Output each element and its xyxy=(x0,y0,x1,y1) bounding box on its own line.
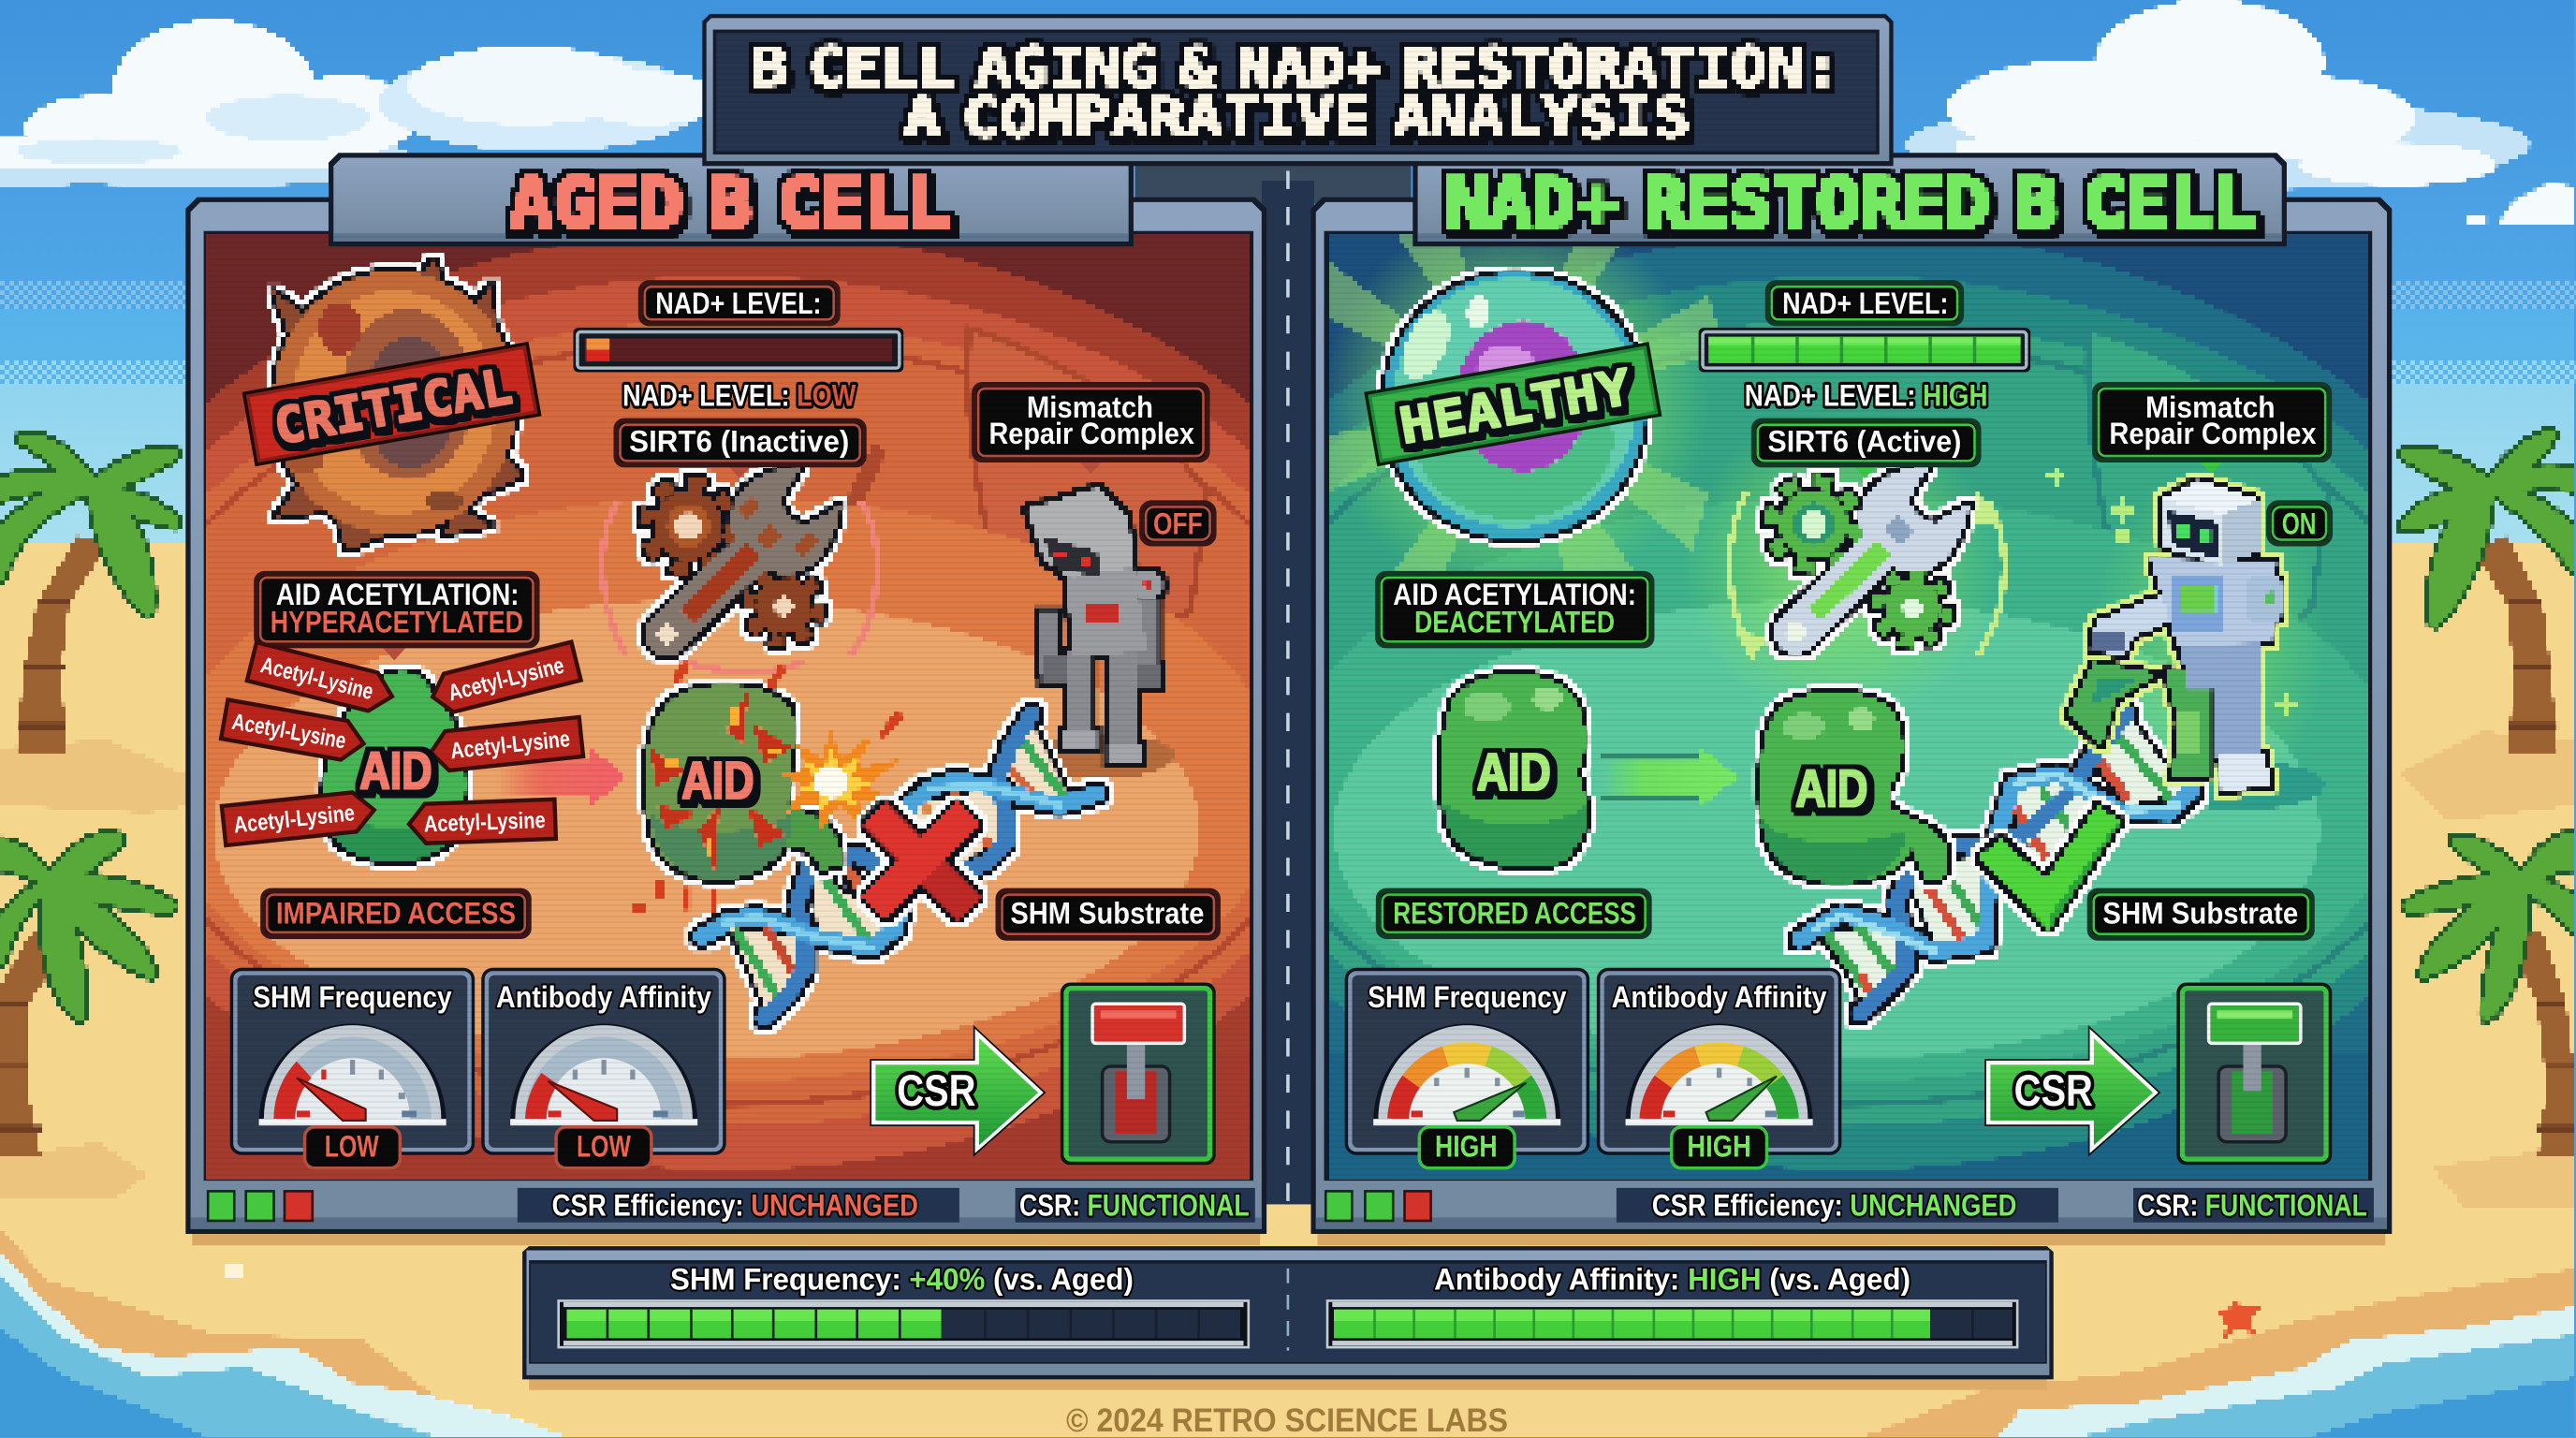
panel: aged B cell xyxy=(37,153,1418,1245)
wet sand band left xyxy=(0,1229,575,1438)
label: SHM substrate restored: SHM Substrate xyxy=(2102,896,2298,930)
label: impaired access: IMPAIRED ACCESS xyxy=(276,896,516,930)
gauge: SHM frequency low xyxy=(231,969,473,1168)
arrow: CSR aged: CSR xyxy=(897,1066,975,1116)
header tab: aged xyxy=(329,153,1134,246)
gauge: antibody affinity low xyxy=(483,969,724,1168)
panel: NAD+ restored B cell xyxy=(1158,153,2538,1245)
bar: NAD+ level low xyxy=(573,328,903,373)
cloud right xyxy=(1906,0,2576,225)
sirt6 inactive glow rings xyxy=(602,501,877,672)
text: NAD+ level high: NAD+ LEVEL: HIGH xyxy=(1745,378,1988,412)
status bar: aged: CSR Efficiency: UNCHANGED xyxy=(552,1189,918,1223)
arrow: aged AID to DNA xyxy=(498,746,626,808)
icon: green check mark xyxy=(1978,805,2121,930)
gauge: SHM frequency low: LOW xyxy=(325,1130,379,1164)
gauge: antibody affinity high: HIGH xyxy=(1687,1130,1751,1164)
aged panel frame xyxy=(185,198,1266,1245)
heading: aged B cell: AGED B CELL xyxy=(509,164,951,242)
status bar: restored: CSR: FUNCTIONAL xyxy=(2137,1189,2367,1223)
icon: critical damaged cell xyxy=(272,259,522,550)
switch: CSR lever aged xyxy=(1063,986,1212,1162)
sand shadow patches xyxy=(0,731,2576,1208)
label: restored access: RESTORED ACCESS xyxy=(1393,896,1636,930)
icon: DNA helix aged xyxy=(701,714,1097,1017)
tag 4: Acetyl-Lysine xyxy=(449,726,571,764)
tag 6 xyxy=(408,800,556,844)
icon: damaged AID enzyme xyxy=(645,685,842,880)
pixel display lettering xyxy=(509,35,2256,242)
label: mismatch repair complex restored xyxy=(2095,385,2330,473)
status bar: aged xyxy=(208,1188,1255,1223)
shallow water left xyxy=(0,1273,444,1438)
label: SIRT6 active: SIRT6 (Active) xyxy=(1767,425,1961,459)
tag 1: Acetyl-Lysine xyxy=(258,653,375,705)
aged cell interior background xyxy=(206,234,1250,1180)
icon: healthy cell xyxy=(1383,272,1647,539)
deep water left xyxy=(0,1328,213,1438)
label: mismatch repair complex aged xyxy=(974,385,1208,473)
label: ON xyxy=(2269,503,2330,544)
heading: NAD+ restored B cell: NAD+ RESTORED B CELL xyxy=(1445,164,2256,242)
cloud left xyxy=(0,20,419,187)
label: SIRT6 inactive: SIRT6 (Inactive) xyxy=(629,425,849,459)
icon: deactivated robot xyxy=(1027,488,1164,764)
badge: HEALTHY plate xyxy=(1364,342,1661,466)
icon: spark burst xyxy=(634,660,903,914)
arrow: CSR restored: CSR xyxy=(2014,1066,2093,1116)
label: AID acetylation hyperacetylated: HYPERACETYLATED xyxy=(271,606,523,639)
text: AID on damaged enzyme: AID xyxy=(681,751,754,810)
label: SHM substrate aged xyxy=(998,890,1218,938)
label: AID acetylation deacetylated: AID ACETYLATION: xyxy=(1393,578,1636,611)
restored cell interior background xyxy=(1158,211,2538,1232)
icon: shiny wrench and gears xyxy=(1745,447,1985,684)
ocean dither band upper xyxy=(0,281,2576,309)
palm tree upper left xyxy=(0,438,174,753)
arrow: CSR restored xyxy=(1985,1027,2159,1155)
central divider strip xyxy=(1135,161,1412,1204)
ocean dither band lower xyxy=(0,360,2576,384)
gauge: SHM frequency low: SHM Frequency xyxy=(253,980,452,1014)
gauge: antibody affinity high xyxy=(1599,969,1840,1168)
tag 2: Acetyl-Lysine xyxy=(446,653,566,706)
label: SIRT6 active xyxy=(1753,420,1979,478)
label: mismatch repair complex aged: Repair Complex xyxy=(989,417,1194,450)
label: OFF: OFF xyxy=(1153,506,1203,540)
gauge: antibody affinity low: LOW xyxy=(577,1130,631,1164)
shell xyxy=(227,1265,242,1277)
palm tree upper right xyxy=(2405,435,2576,753)
title text xyxy=(751,35,1840,150)
sea foam left xyxy=(0,1251,575,1438)
text: AID on hyperacetylated enzyme: AID xyxy=(359,741,432,800)
gauge: SHM frequency high xyxy=(1346,969,1588,1168)
gauge: SHM frequency high: SHM Frequency xyxy=(1368,980,1567,1014)
switch: CSR lever restored xyxy=(2180,986,2329,1162)
header tab: restored xyxy=(1412,153,2287,246)
label: OFF xyxy=(1142,503,1214,544)
tag 5: Acetyl-Lysine xyxy=(232,800,356,839)
icon: active robot xyxy=(2069,479,2282,792)
icon: hyperacetylated AID enzyme xyxy=(324,671,466,861)
palm tree lower left xyxy=(0,839,171,1157)
icon: AID enzyme engaging DNA xyxy=(1761,692,1949,883)
icon: rusty wrench and gears xyxy=(616,448,857,685)
sparkles xyxy=(2047,466,2296,716)
status bar: restored: CSR Efficiency: UNCHANGED xyxy=(1652,1189,2016,1223)
badge text: CRITICAL: CRITICAL xyxy=(271,359,517,456)
sea foam right xyxy=(1996,1306,2576,1438)
label: impaired access xyxy=(263,890,529,936)
palm tree lower right xyxy=(2408,838,2576,1157)
badge text: HEALTHY: HEALTHY xyxy=(1396,359,1635,456)
restored panel labels xyxy=(1325,153,2374,1223)
aged panel labels xyxy=(208,153,1255,1223)
label: AID acetylation hyperacetylated xyxy=(256,573,537,661)
label: SIRT6 inactive xyxy=(616,420,864,478)
label: ON: ON xyxy=(2282,506,2317,540)
label: NAD+ level restored xyxy=(1767,283,1961,324)
starfish xyxy=(2215,1299,2263,1339)
label: restored access xyxy=(1378,890,1649,936)
bar: antibody affinity progress xyxy=(1327,1300,2017,1347)
bar: NAD+ level high xyxy=(1699,328,2030,373)
tag 4 xyxy=(429,717,583,772)
footer credit: © 2024 RETRO SCIENCE LABS xyxy=(1066,1402,1508,1438)
text: SHM frequency result: SHM Frequency: +40% (vs. Aged) xyxy=(670,1263,1134,1297)
label: mismatch repair complex restored: Repair Complex xyxy=(2109,417,2317,450)
gauge: antibody affinity high: Antibody Affinity xyxy=(1612,980,1827,1014)
icon: DNA helix restored xyxy=(1799,714,2193,1014)
label: mismatch repair complex aged: Mismatch xyxy=(1027,390,1153,424)
tag 3 xyxy=(221,699,367,763)
screen scanlines overlay xyxy=(208,33,2368,1178)
cloud behind title left xyxy=(378,46,723,151)
status bar: restored xyxy=(1325,1188,2374,1223)
text: NAD+ level low: NAD+ LEVEL: LOW xyxy=(622,378,856,412)
restored panel artwork xyxy=(1383,272,2296,1014)
restored panel frame xyxy=(1310,198,2392,1245)
shallow water right xyxy=(2070,1334,2576,1438)
tags: acetyl-lysine xyxy=(221,642,583,845)
label: SHM substrate restored xyxy=(2089,890,2312,938)
label: AID acetylation deacetylated xyxy=(1378,573,1652,646)
icon: AID enzyme deacetylated xyxy=(1441,674,1588,867)
gauge: SHM frequency high: HIGH xyxy=(1435,1130,1498,1164)
bottom comparison panel xyxy=(522,1246,2054,1390)
arrow: restored AID to DNA xyxy=(1602,748,1738,807)
tag 2 xyxy=(428,642,581,716)
tag 6: Acetyl-Lysine xyxy=(423,808,546,838)
sirt6 active ring arrows xyxy=(1730,492,2004,661)
label: AID acetylation hyperacetylated: AID ACETYLATION: xyxy=(276,578,520,611)
title text: A COMPARATIVE ANALYSIS xyxy=(903,86,1690,150)
text: AID on engaged enzyme: AID xyxy=(1795,759,1867,818)
badge: CRITICAL plate xyxy=(242,342,542,466)
title text: B CELL AGING & NAD+ RESTORATION: xyxy=(751,35,1840,98)
tag 5 xyxy=(222,790,376,845)
tag 3: Acetyl-Lysine xyxy=(230,710,348,755)
bar: SHM frequency progress xyxy=(559,1300,1249,1347)
icon: red X xyxy=(862,801,981,920)
label: SHM substrate aged: SHM Substrate xyxy=(1010,896,1204,930)
text: antibody affinity result: Antibody Affinity: HIGH (vs. Aged) xyxy=(1434,1263,1910,1297)
aged panel artwork xyxy=(272,259,1164,1017)
arrow: CSR aged xyxy=(871,1027,1045,1155)
text: AID on deacetylated enzyme: AID xyxy=(1477,742,1551,801)
label: mismatch repair complex restored: Mismatch xyxy=(2145,390,2276,424)
status bar: aged: CSR: FUNCTIONAL xyxy=(1019,1189,1250,1223)
deep water right xyxy=(2300,1377,2576,1438)
healthy cell light rays xyxy=(1314,233,1725,608)
label: NAD+ level restored: NAD+ LEVEL: xyxy=(1782,286,1948,320)
label: NAD+ level aged: NAD+ LEVEL: xyxy=(655,286,821,320)
title banner frame xyxy=(702,14,1894,166)
label: AID acetylation deacetylated: DEACETYLATED xyxy=(1414,606,1615,639)
wet sand band right xyxy=(1856,1269,2576,1438)
gauge: antibody affinity low: Antibody Affinity xyxy=(496,980,711,1014)
